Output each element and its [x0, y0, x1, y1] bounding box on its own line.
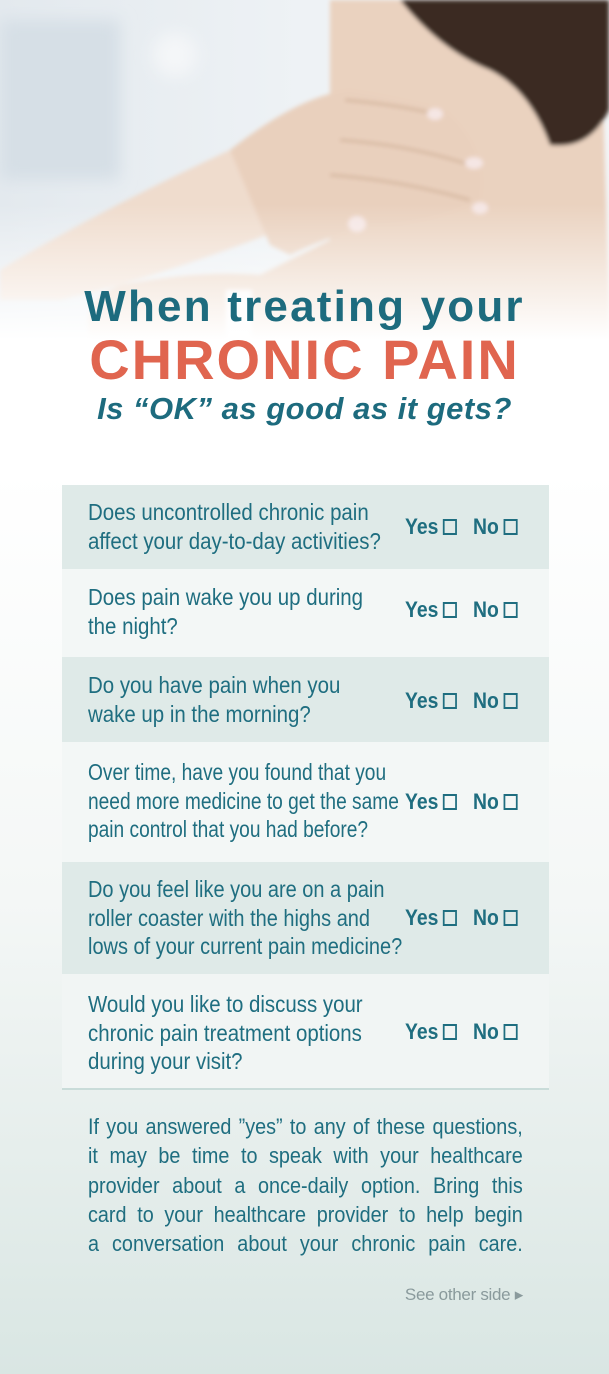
row 5: Yes No	[405, 905, 499, 930]
row 4: need more medicine to get the same	[88, 788, 399, 814]
row 4	[62, 742, 549, 862]
closing paragraph: card to your healthcare provider to help begin	[88, 1202, 523, 1227]
row 6: during your visit?	[88, 1048, 243, 1074]
row 5: lows of your current pain medicine?	[88, 933, 402, 959]
row 4: Yes No	[405, 789, 499, 814]
row 1: Yes No	[405, 514, 499, 539]
title line 2: CHRONIC PAIN	[89, 328, 520, 391]
row 2: the night?	[88, 612, 178, 638]
row 4: pain control that you had before?	[88, 816, 368, 842]
row 6: Would you like to discuss your	[88, 991, 363, 1017]
row 3: wake up in the morning?	[88, 700, 311, 726]
row 5: Do you feel like you are on a pain	[88, 876, 384, 902]
closing paragraph: a conversation about your chronic pain care.	[88, 1231, 523, 1256]
row 2	[62, 569, 549, 657]
row 6: Yes No	[405, 1019, 499, 1044]
question table	[62, 485, 549, 1090]
row 2: Does pain wake you up during	[88, 584, 363, 610]
closing paragraph: it may be time to speak with your healthcare	[88, 1143, 523, 1168]
row 3: Do you have pain when you	[88, 672, 340, 698]
row 2: Yes No	[405, 597, 499, 622]
title line 1: When treating your	[84, 282, 525, 331]
title	[84, 282, 525, 426]
row 5	[62, 862, 549, 974]
see other side link: See other side ▸	[405, 1285, 523, 1304]
row 1	[62, 485, 549, 569]
row 5: roller coaster with the highs and	[88, 904, 370, 930]
row 4: Over time, have you found that you	[88, 759, 386, 785]
subtitle: Is “OK” as good as it gets?	[97, 391, 512, 426]
closing paragraph: If you answered ”yes” to any of these questions,	[88, 1114, 523, 1139]
closing paragraph: provider about a once-daily option. Bring this	[88, 1173, 523, 1198]
row 1: affect your day-to-day activities?	[88, 528, 381, 554]
row 3: Yes No	[405, 688, 499, 713]
closing paragraph	[88, 1114, 523, 1256]
row 6: chronic pain treatment options	[88, 1020, 362, 1046]
row 3	[62, 657, 549, 742]
row 1: Does uncontrolled chronic pain	[88, 499, 369, 525]
row 6	[62, 974, 549, 1090]
photo: woman holding neck	[0, 0, 609, 322]
